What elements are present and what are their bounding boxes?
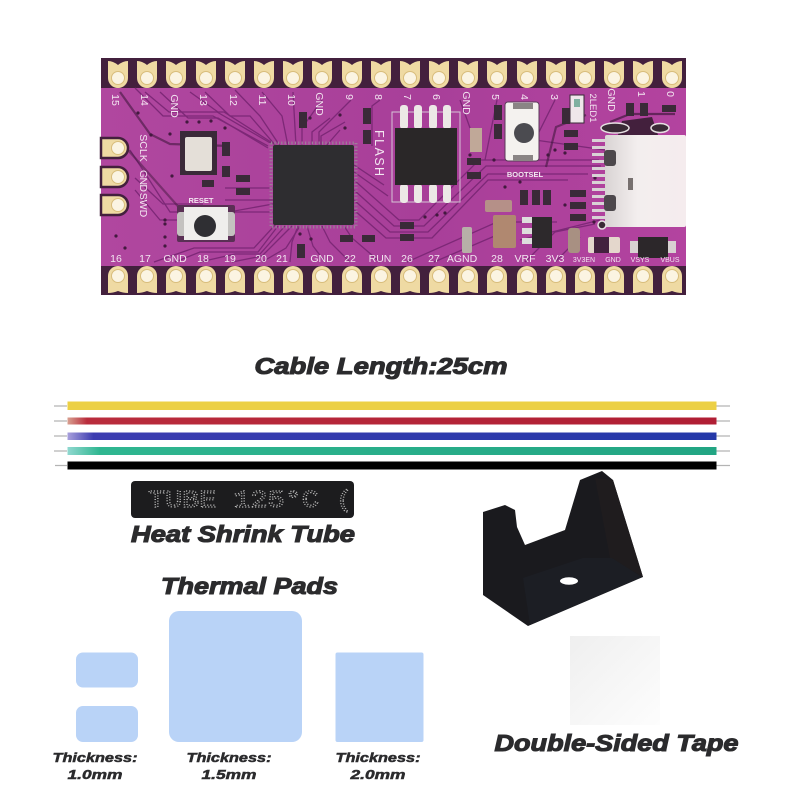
label: thickness 1.5mm: 1.5mm [202,767,257,782]
pin labels along bottom edge: 20 [255,253,267,265]
pin labels along bottom edge: 18 [197,253,209,265]
small surface-mount components [202,95,676,258]
heading: double-sided tape: Double-Sided Tape [494,730,739,756]
USB-C connector [592,117,686,229]
pin labels along top edge: 13 [197,94,209,106]
reset label: RESET [188,196,214,205]
pin labels along top edge [109,88,676,123]
pin labels along top edge: GND [313,92,325,116]
label: thickness 2.0mm: 2.0mm [349,767,406,782]
pin labels along bottom edge [110,253,680,265]
pin labels along top edge: 5 [489,94,501,100]
label: thickness 1.0mm: 1.0mm [68,767,123,782]
pin labels along bottom edge: AGND [447,253,478,265]
pin labels along bottom edge: 28 [491,253,503,265]
vias [114,111,597,250]
pin labels along bottom edge: 3V3EN [573,257,595,264]
board substrate [101,58,686,295]
microcontroller board [101,58,686,295]
yellow wire [68,402,716,410]
pin labels along top edge: 7 [401,94,413,100]
pin labels along bottom edge: RUN [369,253,391,265]
green wire [68,447,716,455]
pin labels along bottom edge: 16 [110,253,122,265]
flash label: FLASH [372,130,386,176]
pin labels along bottom edge: VSYS [631,257,650,264]
pin labels along top edge: 11 [256,95,268,106]
pin labels along top edge: 1 [635,91,647,97]
blue wire [68,432,716,440]
heading: thermal pads: Thermal Pads [161,573,338,599]
pin labels along top edge: GND [168,94,180,118]
pad 1.0mm lower [76,706,138,742]
bootsel button [505,102,539,161]
heading: cable length: Cable Length:25cm [254,353,508,379]
pin labels along top edge: 12 [227,94,239,106]
pin labels along top edge: GND [605,88,617,112]
pin labels along bottom edge: 27 [428,253,440,265]
label: thickness 2.0mm: Thickness: [336,750,420,765]
bootsel label: BOOTSEL [507,170,544,179]
pin labels along bottom edge: GND [605,257,621,264]
pin labels along bottom edge: 21 [276,253,288,265]
wire tips [54,406,730,466]
pin labels along bottom edge: 19 [224,253,236,265]
reset button [177,205,235,242]
heading: heat shrink tube: Heat Shrink Tube [131,521,355,547]
thermal pads group [76,611,424,742]
stand mounting hole [560,577,578,585]
crystal oscillator [180,131,217,175]
pin labels along top edge: 8 [372,94,384,100]
dark pad surrounds [101,58,686,295]
pin labels along top edge: 10 [285,94,297,106]
pin labels along top edge: 15 [109,94,121,106]
heat shrink tube [131,481,354,518]
black stand [483,471,643,626]
pin labels along bottom edge: VBUS [660,257,680,264]
pin labels along bottom edge: 26 [401,253,413,265]
debug pin labels [137,134,149,218]
black wire [68,462,716,470]
pad 1.0mm upper [76,652,138,688]
debug pin labels: SCLK [137,134,149,162]
pad 2.0mm [336,652,424,742]
pin labels along bottom edge: 3V3 [546,253,564,265]
pin labels along top edge: GND [460,91,472,115]
pin labels along bottom edge: GND [310,253,334,265]
pin labels along top edge: 2LED1 [587,93,598,123]
tube printing: TUBE 125°C ( [148,488,353,515]
pin labels along top edge: 14 [138,94,150,106]
double-sided tape [570,636,660,725]
pin labels along bottom edge: 22 [344,253,356,265]
debug pin labels: SWD [137,193,149,218]
copper traces [120,88,675,262]
label: thickness 1.5mm: Thickness: [186,750,272,765]
pin labels along bottom edge: 17 [139,253,151,265]
pin labels along top edge: 0 [664,91,676,97]
flash memory chip [392,105,460,203]
pin labels along bottom edge: GND [163,253,187,265]
debug pin labels: GND [137,170,149,192]
pin labels along top edge: 3 [548,94,560,100]
main processor chip [271,143,356,227]
pin labels along top edge: 4 [518,94,530,100]
pin labels along top edge: 9 [343,94,355,100]
pad 1.5mm [169,611,302,742]
wires [54,402,730,470]
castellated pads [101,61,682,293]
label: thickness 1.0mm: Thickness: [52,750,138,765]
red wire [68,418,716,424]
pin labels along top edge: 6 [430,94,442,100]
pin labels along bottom edge: VRF [514,253,536,265]
